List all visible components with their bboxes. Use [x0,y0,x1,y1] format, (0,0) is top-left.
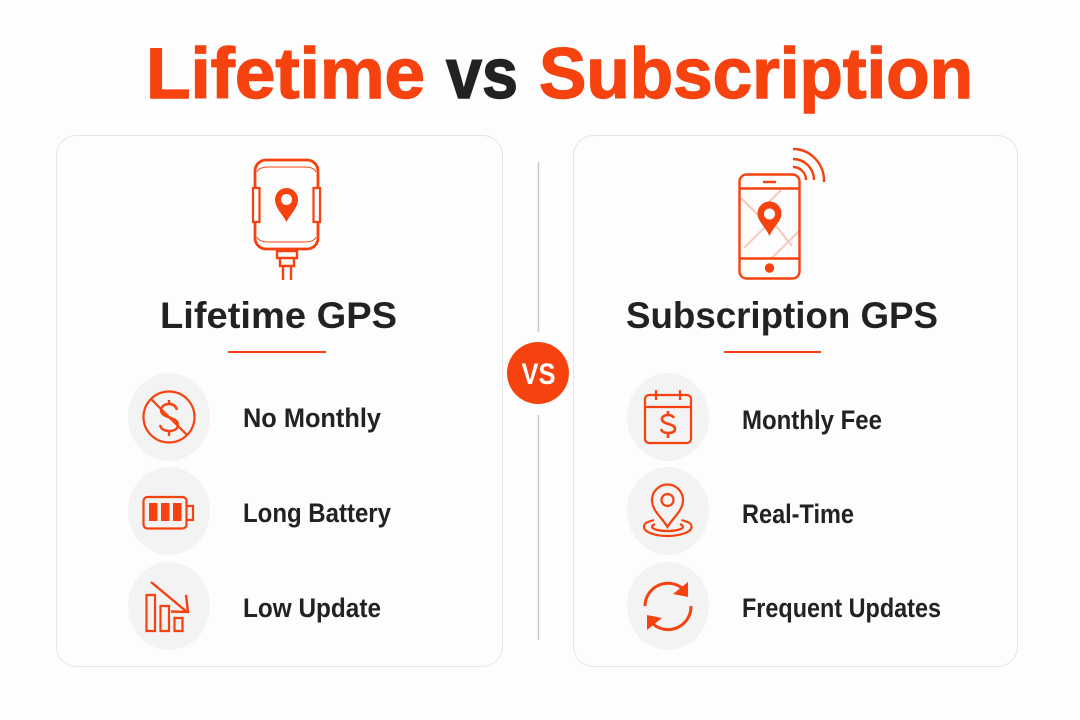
icon: GPS device [253,160,320,280]
icon: location rings [644,484,692,536]
panel: subscription GPS [574,136,1018,666]
badge: VS [507,342,569,404]
divider: center [538,162,540,640]
label: Low Update: Low Update [243,593,381,623]
title: Subscription [539,35,973,114]
label: Frequent Updates: Frequent Updates [742,593,941,623]
title: Lifetime [146,35,425,114]
badge: VS: VS [522,358,556,391]
label: Monthly Fee: Monthly Fee [742,405,882,435]
heading: Lifetime GPS: Lifetime GPS [160,295,397,336]
icon: refresh arrows [645,582,691,630]
label: Long Battery: Long Battery [243,498,391,528]
icon: calendar dollar [645,390,691,443]
label: No Monthly: No Monthly [243,403,381,433]
heading: Subscription GPS: Subscription GPS [626,295,938,336]
icon: declining bars [146,582,188,631]
icon: battery [144,497,193,528]
panel: lifetime GPS [56,136,502,666]
item: Long Battery [128,467,391,555]
icon: no dollar [144,392,194,442]
item: Monthly Fee [627,373,882,461]
underline: subscription [724,351,821,353]
title: vs [446,35,518,114]
label: Real-Time: Real-Time [742,499,854,529]
item: Real-Time [627,467,854,555]
icon: smartphone with signal [740,149,824,278]
item: No Monthly [128,373,381,461]
title [146,35,973,114]
underline: lifetime [228,351,326,353]
item: Frequent Updates [627,562,941,650]
item: Low Update [128,562,381,650]
